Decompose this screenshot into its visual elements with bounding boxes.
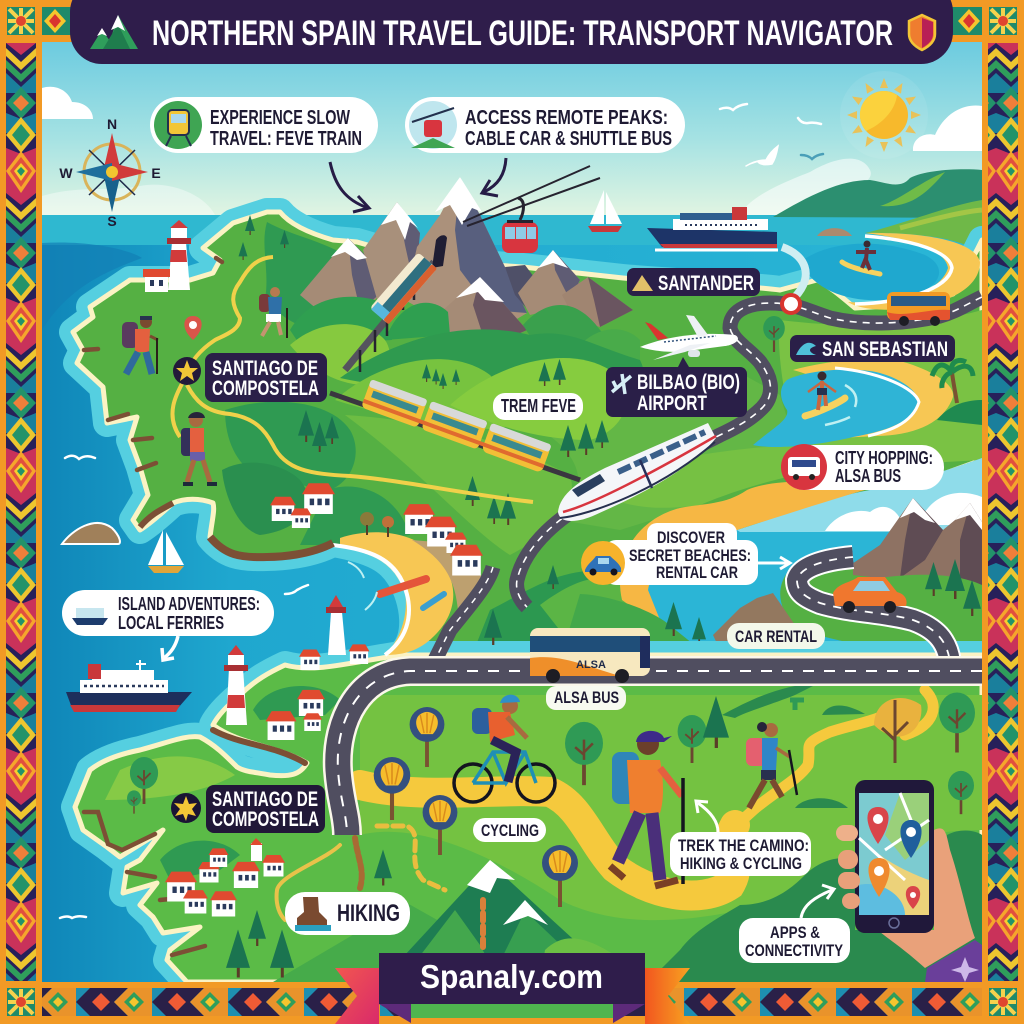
label: Discover secret beaches — [581, 523, 758, 585]
sand trails — [277, 690, 933, 950]
label: Access remote peaks: CABLE CAR & SHUTTLE BUS — [465, 128, 672, 150]
road: main highway — [338, 671, 982, 835]
label: Santiago de Compostela north: COMPOSTELA — [212, 377, 319, 400]
label: Cycling: CYCLING — [481, 821, 539, 840]
icon: palm — [932, 360, 973, 403]
label: Discover secret beaches: SECRET BEACHES: — [629, 546, 751, 565]
label: Santiago de Compostela south: COMPOSTELA — [212, 808, 319, 831]
label: Hiking — [285, 892, 410, 935]
label: Trek the Camino — [670, 832, 811, 876]
icon: scallop markers — [374, 707, 578, 907]
icon: village upper — [270, 483, 483, 576]
icon: arrow to Feve mountain — [330, 162, 369, 212]
label: ALSA bus: ALSA BUS — [554, 688, 619, 707]
icon: compass rose — [59, 116, 161, 229]
icon: surfer — [805, 372, 845, 416]
icon: high speed train — [558, 423, 716, 521]
far hills — [773, 169, 982, 265]
icon: compass rose: S — [107, 213, 117, 229]
icon: compass rose: W — [59, 165, 73, 181]
label: Bilbao airport — [606, 357, 747, 417]
label: Santiago de Compostela north — [173, 353, 327, 402]
icon: lighthouse south — [224, 645, 325, 740]
icon: Feve train track — [330, 393, 580, 480]
coastal cliffs — [84, 258, 305, 955]
label: Discover secret beaches: RENTAL CAR — [656, 563, 738, 582]
icon: airplane — [640, 315, 738, 360]
label: Experience slow travel: EXPERIENCE SLOW — [210, 107, 350, 129]
icon: lighthouse central — [299, 595, 370, 670]
icon: sailboat — [588, 190, 622, 232]
label: Car rental: CAR RENTAL — [735, 627, 817, 646]
label: Bilbao airport: AIRPORT — [637, 392, 707, 415]
icon: map pin north — [184, 316, 202, 340]
panel: southern land — [75, 655, 982, 982]
icon: funicular train — [345, 235, 447, 372]
label: Apps and connectivity — [739, 918, 850, 963]
label: City hopping — [781, 444, 944, 490]
icon: sun — [840, 71, 928, 159]
label: Santiago de Compostela north: SANTIAGO DE — [212, 357, 318, 380]
icon: female hiker — [746, 722, 797, 808]
icon: cyclist — [454, 695, 555, 802]
icon: shield — [909, 15, 935, 50]
icon: village south — [165, 838, 285, 916]
icon: hiker north — [259, 287, 287, 338]
icon: ALSA bus — [530, 628, 650, 683]
label: City hopping: ALSA BUS — [835, 466, 901, 486]
label: Trek the Camino: TREK THE CAMINO: — [678, 836, 809, 855]
icon: arrow trek — [696, 801, 718, 832]
icon: map pin Santander — [782, 295, 800, 313]
label: City hopping: CITY HOPPING: — [835, 448, 933, 468]
mountains — [300, 177, 633, 348]
surf bay — [753, 359, 953, 447]
road: rental car route — [797, 557, 950, 662]
label: Hiking: HIKING — [337, 900, 400, 927]
yellow trail north — [172, 257, 533, 502]
label: Trem Feve: TREM FEVE — [501, 396, 576, 416]
footer banner — [335, 953, 690, 1024]
label: Bilbao airport: BILBAO (BIO) — [637, 371, 740, 394]
icon: compass rose: E — [151, 165, 161, 181]
icon: hiker west — [122, 316, 158, 374]
icon: arrow apps — [801, 885, 834, 918]
icon: cable car — [463, 166, 600, 253]
label: Access remote peaks: ACCESS REMOTE PEAKS: — [465, 107, 668, 129]
icon: surfer top — [842, 240, 880, 274]
icon: sailboat small — [148, 530, 184, 573]
label: Access remote peaks — [405, 97, 685, 153]
label: Experience slow travel — [150, 97, 378, 153]
icon: ferry south — [66, 660, 192, 712]
icon: arrow from ferries — [162, 636, 178, 660]
icon: mountain logo — [90, 15, 138, 49]
icon: arrow to cable car — [482, 158, 506, 196]
birds — [60, 104, 823, 918]
label: Santiago de Compostela south: SANTIAGO DE — [212, 788, 318, 811]
label: San Sebastian: SAN SEBASTIAN — [822, 338, 948, 361]
central bay — [140, 503, 482, 655]
trees on northern land — [238, 215, 785, 645]
label: Island adventures: ISLAND ADVENTURES: — [118, 594, 260, 614]
icon: ferry top — [647, 207, 778, 250]
icon: hiker south west — [181, 412, 217, 484]
label: Santander: SANTANDER — [658, 272, 754, 295]
icon: rock — [62, 523, 120, 544]
road: bay connector — [435, 567, 493, 660]
label: Apps and connectivity: CONNECTIVITY — [745, 941, 844, 960]
icon: main hiker — [610, 731, 683, 886]
icon: arrow to secret beach — [758, 557, 790, 569]
label: Trem Feve — [493, 393, 583, 420]
right coast hills and mountains — [560, 498, 982, 662]
icon: compass rose: N — [107, 116, 117, 132]
label: Apps and connectivity: APPS & — [770, 923, 820, 942]
green hills — [290, 297, 644, 440]
label: Discover secret beaches: DISCOVER — [657, 528, 725, 547]
icon: Feve train — [361, 379, 552, 473]
label: Car rental — [727, 623, 825, 649]
icon: phone in hand — [836, 780, 982, 982]
icon: bus top right — [887, 292, 950, 326]
title banner — [70, 0, 953, 64]
label: Island adventures — [62, 590, 274, 636]
clouds — [42, 87, 982, 215]
icon: rental car — [833, 577, 907, 613]
label: Santiago de Compostela south — [171, 785, 325, 833]
label: Santander — [627, 268, 760, 296]
panel: northern mainland — [73, 212, 982, 660]
label: Cycling — [473, 818, 546, 842]
label: ALSA bus — [546, 686, 626, 710]
icon: lighthouse north — [143, 220, 191, 292]
road: coastal highway — [517, 297, 982, 607]
icon: ALSA bus: ALSA — [576, 659, 606, 671]
label: Island adventures: LOCAL FERRIES — [118, 613, 224, 633]
label: Experience slow travel: TRAVEL: FEVE TRAIN — [210, 128, 362, 150]
trees on southern land — [127, 692, 975, 978]
site name: Spanaly.com — [420, 958, 603, 995]
label: San Sebastian — [790, 335, 955, 362]
top right bay beach — [782, 228, 980, 310]
label: Trek the Camino: HIKING & CYCLING — [680, 854, 802, 873]
right middle sea — [620, 458, 982, 660]
